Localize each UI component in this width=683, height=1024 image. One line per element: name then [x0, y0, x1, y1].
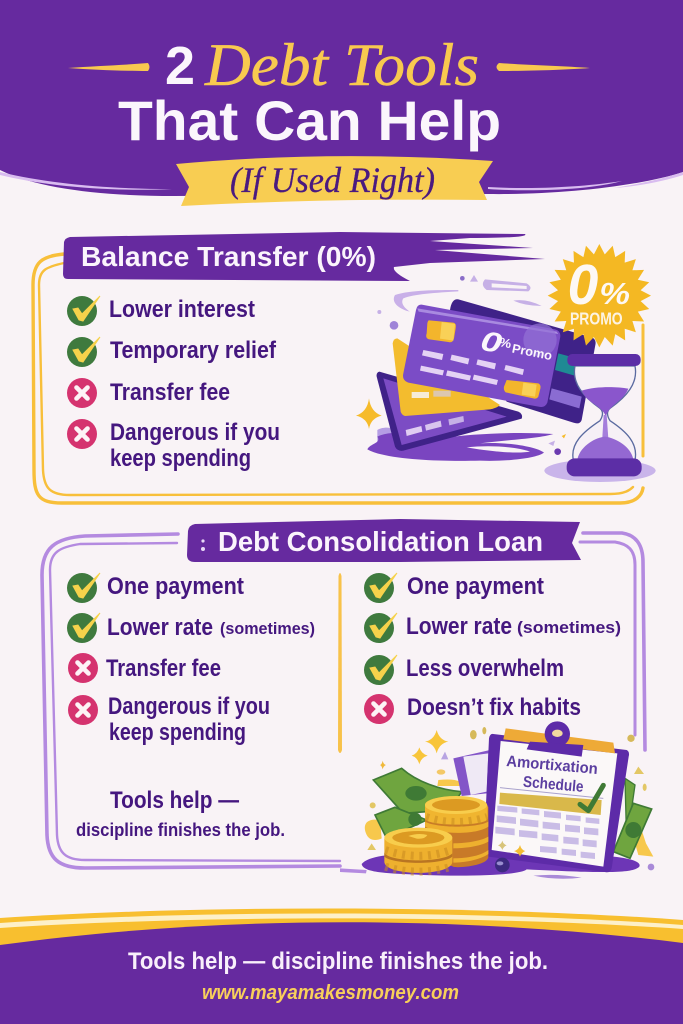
coins: back stack — [425, 796, 510, 872]
ribbon: if used right — [176, 156, 493, 206]
ground — [340, 853, 640, 879]
pin and sparkles — [356, 275, 566, 455]
title: Debt Tools — [204, 32, 479, 98]
title — [68, 32, 590, 152]
coins: front stack — [384, 828, 452, 873]
front card: 0 — [478, 325, 505, 359]
front card: % — [498, 335, 513, 351]
footer — [0, 908, 683, 1024]
clipboard — [484, 721, 629, 872]
banner: debt consolidation: Debt Consolidation Loan — [218, 526, 543, 557]
bills: left — [373, 768, 462, 838]
list: right column: Lower rate — [406, 613, 512, 640]
list: balance transfer: Transfer fee — [110, 379, 230, 406]
list: left column — [67, 573, 315, 746]
badge: 0% promo — [548, 244, 651, 347]
panel: balance transfer — [33, 232, 656, 503]
title: 2 — [165, 36, 195, 96]
front card: Promo — [511, 342, 554, 363]
list: balance transfer: Lower interest — [109, 296, 255, 323]
bills: right — [613, 778, 652, 858]
banner: balance transfer — [63, 232, 545, 281]
clipboard: Schedule — [522, 774, 584, 796]
callout: tools help — [76, 787, 285, 840]
clipboard: Amortixation — [506, 753, 598, 778]
swoosh — [367, 290, 553, 461]
list: right column — [364, 573, 621, 724]
list: left column: keep spending — [109, 719, 246, 746]
footer: Tools help — discipline finishes the job. — [128, 948, 548, 975]
badge: 0% promo: % — [599, 277, 630, 311]
hourglass — [544, 354, 656, 482]
list: right column: (sometimes) — [517, 618, 621, 637]
chip — [426, 320, 456, 342]
header band — [0, 0, 683, 196]
lower card — [377, 372, 522, 451]
illustration: credit cards and hourglass — [356, 244, 656, 482]
divider — [338, 573, 342, 753]
list: balance transfer: Temporary relief — [110, 337, 277, 364]
list: right column: Less overwhelm — [406, 655, 564, 682]
list: left column: (sometimes) — [220, 619, 315, 638]
list: left column: Dangerous if you — [108, 693, 270, 720]
list: right column: One payment — [407, 573, 544, 600]
list: left column: Transfer fee — [106, 655, 221, 682]
title: That Can Help — [118, 89, 501, 152]
back card — [450, 299, 596, 423]
list: right column: Doesn’t fix habits — [407, 694, 581, 721]
badge: 0% promo: PROMO — [570, 309, 623, 329]
list: balance transfer: Dangerous if you — [110, 419, 280, 446]
list: left column: One payment — [107, 573, 244, 600]
list: left column: Lower rate — [107, 614, 213, 641]
gold card — [393, 338, 500, 416]
banner: debt consolidation — [187, 519, 581, 562]
illustration: money and amortization schedule — [340, 721, 654, 879]
callout: tools help: Tools help — — [110, 787, 239, 814]
panel: debt consolidation loan — [42, 519, 654, 879]
banner: balance transfer: Balance Transfer (0%) — [81, 241, 376, 272]
front card — [403, 305, 560, 407]
gold frame — [33, 254, 643, 503]
sparkles — [365, 727, 654, 870]
callout: tools help: discipline finishes the job. — [76, 820, 285, 840]
list: balance transfer: keep spending — [110, 445, 251, 472]
badge: 0% promo: 0 — [568, 254, 598, 317]
ribbon: if used right: (If Used Right) — [230, 160, 435, 200]
list: balance transfer — [67, 296, 280, 472]
papers — [453, 750, 490, 796]
footer: www.mayamakesmoney.com — [202, 982, 459, 1004]
lilac frame — [42, 533, 645, 868]
